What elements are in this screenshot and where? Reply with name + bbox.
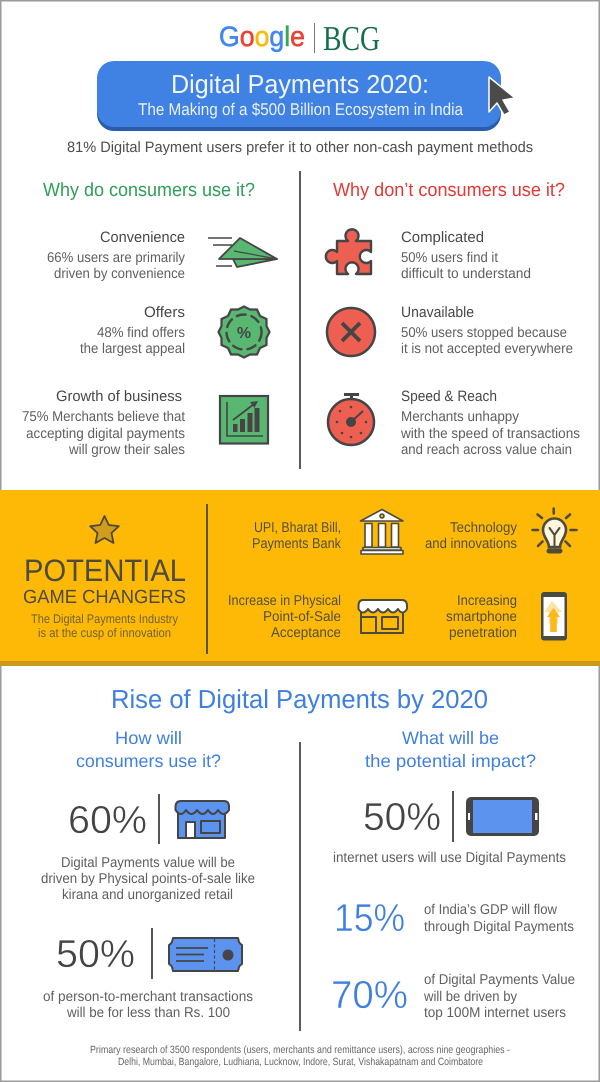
text block: UPI: UPI, Bharat Bill,	[254, 520, 341, 536]
text block: growth of business: Growth of business	[56, 388, 182, 405]
stat divider	[452, 791, 454, 842]
text block: complicated: 50% users find it	[401, 250, 498, 266]
text block: unavailable: it is not accepted everywhere	[401, 341, 573, 357]
heading: why use: Why do consumers use it?	[43, 180, 255, 201]
text block: 50 percent merchants description: of person-to-merchant transactions	[43, 989, 253, 1005]
centre divider bottom	[299, 742, 301, 1031]
text block: convenience: Convenience	[100, 229, 185, 246]
text block: growth of business	[22, 388, 185, 458]
icon: ticket	[169, 938, 242, 971]
stat: 70 percent: 70%	[331, 974, 408, 1017]
heading: how will consumers use it: How will	[115, 728, 182, 748]
icon: store white	[358, 600, 407, 633]
text block: offers: Offers	[144, 304, 185, 321]
text block: value description: of Digital Payments Value	[424, 972, 575, 988]
title button	[97, 61, 515, 131]
text block: unavailable: 50% users stopped because	[401, 325, 567, 341]
text block: UPI	[252, 520, 342, 552]
heading: what will be the potential impact	[365, 728, 536, 771]
text block: unavailable	[401, 304, 573, 357]
stat divider	[158, 794, 160, 844]
text block: technology: and innovations	[425, 536, 517, 552]
icon: growth chart	[220, 396, 268, 444]
text block: GDP description: through Digital Payments	[424, 919, 574, 935]
intro statement: 81% Digital Payment users prefer it to other non-cash payment methods	[67, 139, 533, 156]
text block: point of sale: Point-of-Sale	[263, 609, 341, 625]
panel: why consumers use it	[22, 180, 277, 458]
icon: landscape phone	[466, 797, 539, 836]
text block: 60 percent description	[41, 855, 255, 903]
text block: technology: Technology	[450, 520, 518, 536]
logos: Google and BCG: Google	[219, 21, 305, 52]
text block: internet users description: internet users will use Digital Payments	[333, 850, 566, 866]
icon: paper plane	[208, 238, 277, 267]
icon: discount badge: %	[237, 325, 251, 342]
text block: 50 percent merchants description	[43, 989, 253, 1021]
heading: why not use: Why don’t consumers use it?	[333, 180, 565, 201]
text block: GDP description	[424, 902, 574, 935]
text block: smartphone: smartphone	[446, 609, 517, 625]
text block: speed and reach: and reach across value chain	[401, 442, 572, 458]
text block: band subtitle: The Digital Payments Industry	[31, 612, 179, 626]
panel: potential impact	[331, 728, 575, 1021]
subtitle text: The Making of a $500 Billion Ecosystem in India	[138, 100, 463, 119]
icon: puzzle piece	[326, 229, 371, 274]
text block: GDP description: of India’s GDP will flow	[424, 902, 558, 918]
text block: 60 percent description: driven by Physical points-of-sale like	[41, 871, 255, 887]
text block: value description: will be driven by	[423, 989, 518, 1005]
footnote: Primary research of 3500 respondents (users, merchants and remittance users), across nine geographies -	[90, 1044, 510, 1056]
title text: Digital Payments 2020:	[171, 69, 429, 99]
stat: 15 percent: 15%	[334, 897, 405, 940]
panel: potential game changers band	[0, 490, 600, 666]
icon: star	[90, 516, 119, 543]
text block: point of sale: Acceptance	[271, 625, 341, 641]
heading: potential: POTENTIAL	[24, 553, 186, 588]
stat divider	[151, 928, 153, 979]
icon: stopwatch	[328, 393, 374, 445]
logos: Google and BCG	[219, 19, 380, 58]
text block: smartphone: Increasing	[457, 593, 517, 609]
text block: growth of business: accepting digital payments	[26, 426, 185, 442]
text block: complicated	[401, 229, 531, 282]
logos: Google and BCG: BCG	[323, 19, 380, 58]
icon: light bulb	[532, 508, 576, 551]
icon: discount badge	[218, 306, 270, 358]
text block: speed and reach: Merchants unhappy	[401, 409, 520, 425]
centre divider top	[299, 171, 301, 469]
text block: growth of business: will grow their sales	[68, 442, 185, 458]
text block: offers: 48% find offers	[97, 325, 185, 341]
panel: how will consumers use it	[41, 728, 255, 1021]
text block: point of sale: Increase in Physical	[228, 593, 341, 609]
text block: value description	[423, 972, 575, 1021]
text block: convenience: 66% users are primarily	[47, 250, 186, 266]
text block: smartphone: penetration	[449, 625, 517, 641]
text block: UPI: Payments Bank	[252, 536, 342, 552]
heading: how will consumers use it	[76, 728, 221, 771]
stat: 50 percent merchants: 50%	[56, 933, 135, 976]
text block: smartphone	[446, 593, 517, 641]
text block: point of sale	[228, 593, 341, 641]
text block: speed and reach: Speed & Reach	[401, 388, 497, 405]
text block: value description: top 100M internet users	[424, 1005, 566, 1021]
text block: band subtitle: is at the cusp of innovation	[38, 626, 171, 640]
icon: smartphone with arrow	[541, 592, 567, 640]
icon: store blue	[176, 801, 229, 838]
icon: cross circle	[327, 308, 375, 356]
text block: speed and reach	[400, 388, 580, 458]
text block: technology	[425, 520, 518, 552]
icon: bank building	[360, 510, 403, 554]
text block: band subtitle	[31, 612, 179, 640]
stat: 50 percent internet users: 50%	[363, 796, 441, 839]
heading: game changers: GAME CHANGERS	[23, 587, 186, 608]
heading: what will be the potential impact: the potential impact?	[365, 751, 536, 771]
text block: growth of business: 75% Merchants believe that	[22, 409, 185, 425]
footnote: Delhi, Mumbai, Bangalore, Ludhiana, Lucknow, Indore, Surat, Vishakapatnam and Coimbatore	[118, 1056, 483, 1068]
heading: how will consumers use it: consumers use it?	[76, 751, 221, 771]
text block: offers: the largest appeal	[80, 341, 185, 357]
text block: convenience: driven by convenience	[54, 266, 185, 282]
text block: 60 percent description: kirana and unorganized retail	[62, 887, 233, 903]
text block: 50 percent merchants description: will be for less than Rs. 100	[66, 1005, 230, 1021]
text block: 60 percent description: Digital Payments value will be	[61, 855, 235, 871]
text block: speed and reach: with the speed of transactions	[400, 426, 580, 442]
heading: rise of digital payments: Rise of Digital Payments by 2020	[111, 684, 488, 714]
band divider	[206, 504, 208, 654]
text block: unavailable: Unavailable	[401, 304, 474, 321]
panel: why consumers do not use it	[326, 180, 580, 458]
icon: cursor	[489, 77, 515, 115]
footnote	[90, 1044, 510, 1068]
text block: convenience	[47, 229, 186, 282]
heading: what will be the potential impact: What will be	[402, 728, 499, 748]
text block: complicated: Complicated	[401, 229, 484, 246]
text block: complicated: difficult to understand	[401, 266, 531, 282]
stat: 60 percent: 60%	[68, 799, 147, 842]
text block: offers	[80, 304, 185, 357]
